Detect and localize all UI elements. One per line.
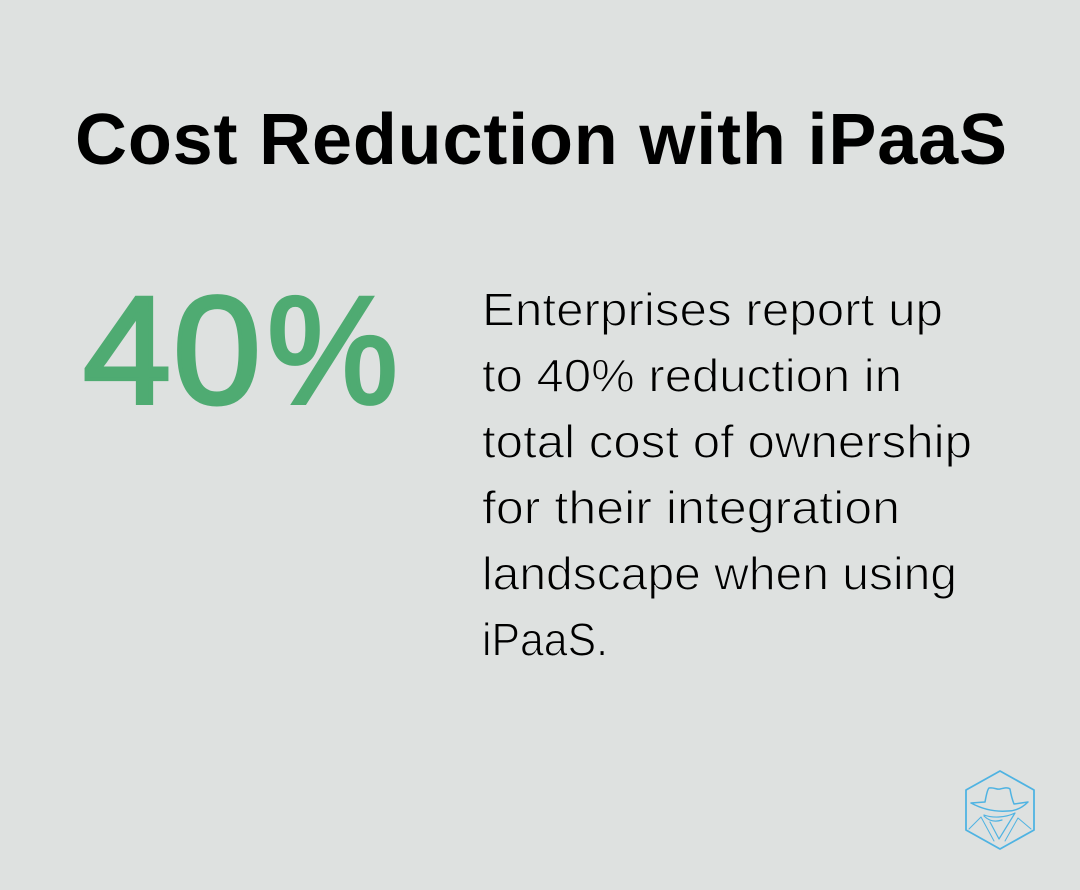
hat	[971, 788, 1028, 811]
mask	[984, 813, 1015, 839]
description text	[482, 284, 972, 666]
description text: total cost of ownership	[482, 416, 972, 468]
description text: Enterprises report up	[482, 284, 943, 336]
big stat: 40%: 4	[83, 265, 171, 436]
description text: for their integration	[482, 482, 900, 534]
big stat: 40%: 0	[173, 265, 261, 436]
hexagon outline	[966, 771, 1034, 849]
description text: to 40% reduction in	[482, 350, 902, 402]
icon: hexagon logo with hat and mask	[966, 771, 1034, 849]
collar	[969, 817, 1031, 841]
big stat: 40%: %	[267, 265, 398, 436]
big stat: 40%	[83, 265, 398, 436]
description text: landscape when using	[482, 548, 957, 600]
title: Cost Reduction with iPaaS	[75, 100, 1007, 180]
description text: iPaaS.	[482, 614, 608, 666]
